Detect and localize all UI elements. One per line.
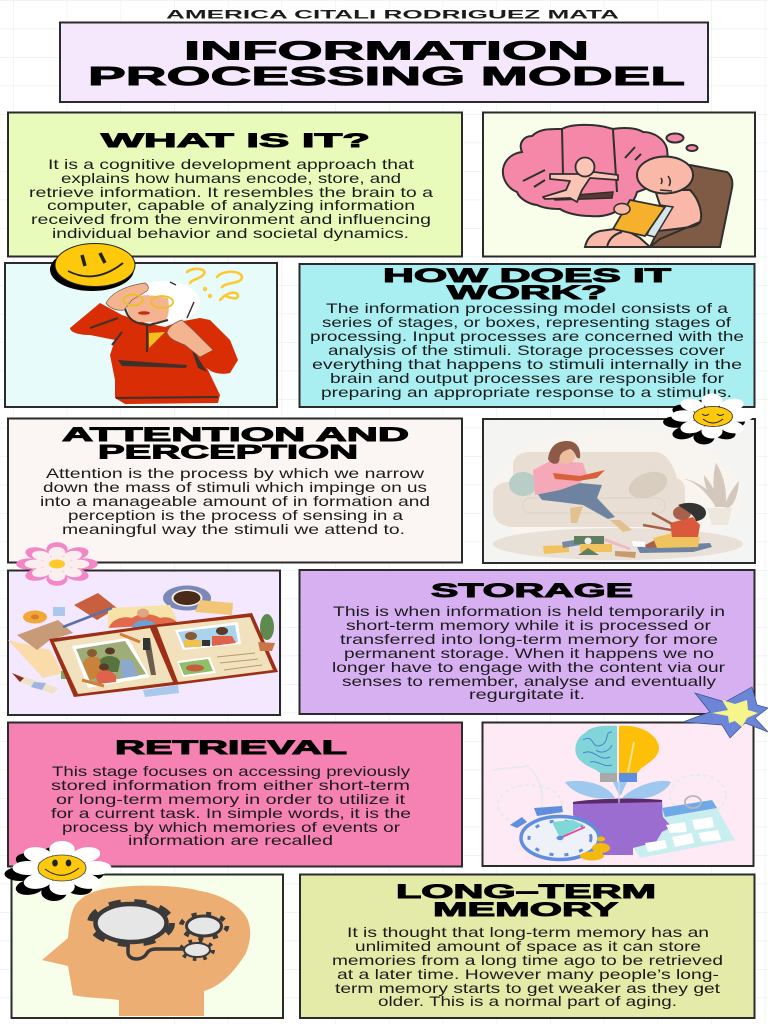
text: long-term memory — [332, 924, 723, 1009]
text: storage: senses to remember, analyse and eventually — [342, 673, 716, 689]
text: how does it work: processing. Input processes are concerned with the — [310, 328, 744, 344]
panel: brain lightbulb illustration — [482, 722, 754, 866]
text: what is it: retrieve information. It resembles the brain to a — [29, 184, 433, 200]
text: attention and perception: meaningful way the stimuli we attend to. — [62, 521, 405, 537]
heading: how does it work: HOW DOES IT — [383, 266, 672, 287]
heading: storage: STORAGE — [431, 581, 633, 602]
text: how does it work — [310, 300, 744, 400]
text: what is it: individual behavior and societal dynamics. — [52, 225, 409, 241]
heading: attention and perception: ATTENTION AND — [62, 425, 409, 446]
icon: small gear — [181, 941, 213, 959]
text: long-term memory: older. This is a normal part of aging. — [378, 993, 677, 1009]
icon: sofa — [493, 452, 685, 527]
icon: large gear — [90, 902, 172, 944]
text: storage: longer have to engage with the content via our — [332, 659, 725, 675]
icon: soft background oval — [492, 428, 742, 560]
heading: long-term memory: LONG–TERM — [396, 882, 656, 903]
icon: open album — [49, 613, 278, 697]
text: what is it: computer, capable of analyzing information — [47, 197, 415, 213]
panel: thought bubble illustration — [483, 112, 755, 256]
icon: small thought bubbles — [666, 134, 698, 151]
heading: long-term memory: MEMORY — [433, 900, 619, 921]
heading: how does it work: WORK? — [447, 283, 607, 304]
text: attention and perception: perception is the process of sensing in a — [68, 507, 403, 523]
icon: stopwatch — [510, 806, 599, 860]
text: what is it: received from the environment and influencing — [31, 211, 431, 227]
icon: chair — [650, 165, 732, 247]
icon: woman in red hoodie — [70, 281, 238, 404]
icon: connector pipe — [128, 941, 185, 959]
text: how does it work: preparing an appropriate response to a stimulus. — [321, 384, 732, 400]
text: storage — [332, 603, 725, 702]
icon: leaves — [565, 781, 671, 800]
icon: pink flower sticker — [16, 542, 98, 586]
text: how does it work: The information processing model consists of a — [326, 300, 728, 316]
icon: plant — [684, 463, 739, 525]
icon: question marks — [187, 269, 242, 300]
text: retrieval: for a current task. In simple words, it is the — [51, 805, 411, 821]
panel: attention and perception — [8, 418, 462, 562]
icon: coins — [580, 836, 610, 860]
icon: calendar — [634, 796, 735, 858]
text: what is it — [29, 156, 433, 241]
icon: star sticker — [683, 687, 768, 738]
heading: long-term memory — [396, 882, 656, 921]
icon: sleepy daisy sticker — [663, 394, 753, 444]
icon: baby — [632, 503, 712, 553]
icon: reading mother — [533, 441, 632, 532]
text: storage: regurgitate it. — [469, 686, 585, 702]
text: long-term memory: term memory starts to get weaker as they get — [335, 980, 720, 996]
panel: mother and baby illustration — [483, 419, 755, 563]
text: retrieval: information are recalled — [128, 832, 333, 848]
heading: attention and perception — [62, 425, 409, 464]
heading: retrieval: RETRIEVAL — [115, 738, 348, 759]
icon: head silhouette — [42, 886, 250, 1016]
text: long-term memory: unlimited amount of space as it can store — [355, 938, 701, 954]
text: storage: short-term memory while it is processed or — [346, 617, 711, 633]
text: storage: This is when information is held temporarily in — [333, 603, 725, 619]
panel: how does it work — [300, 264, 754, 407]
heading: how does it work — [383, 266, 672, 304]
heading: attention and perception: PERCEPTION — [98, 442, 358, 464]
title banner: INFORMATION — [184, 36, 589, 66]
title banner — [60, 22, 708, 102]
icon: smiling daisy sticker — [4, 841, 112, 901]
icon: faint background gears and leaves — [492, 766, 726, 825]
text: retrieval: process by which memories of events or — [62, 819, 400, 835]
text: what is it: explains how humans encode, store, and — [61, 170, 401, 186]
text: storage: transferred into long-term memory for more — [340, 631, 718, 647]
icon: reading person — [585, 156, 701, 247]
text: attention and perception: Attention is the process by which we narrow — [46, 465, 425, 481]
text: what is it: It is a cognitive development approach that — [48, 156, 414, 172]
text: long-term memory: at a later time. However many people’s long- — [337, 966, 719, 982]
text: how does it work: series of stages, or boxes, representing stages of — [322, 314, 731, 330]
panel: storage — [300, 570, 754, 714]
icon: purple head — [573, 780, 672, 855]
text: storage: permanent storage. When it happens we no — [344, 645, 714, 661]
text: retrieval — [51, 763, 411, 848]
icon: medium gear — [181, 914, 227, 938]
icon: toy blocks — [543, 536, 636, 558]
panel: head with gears illustration — [12, 874, 283, 1018]
icon: coffee cup — [163, 586, 211, 610]
text: retrieval: This stage focuses on accessing previously — [52, 763, 410, 779]
panel: photo album illustration — [8, 570, 280, 715]
title banner: PROCESSING MODEL — [88, 61, 685, 91]
text: attention and perception: into a manageable amount of in formation and — [40, 493, 430, 509]
icon: smiley sticker — [50, 244, 135, 291]
icon: rug — [493, 528, 743, 560]
icon: swing with baby — [523, 129, 641, 202]
text: attention and perception: down the mass of stimuli which impinge on us — [43, 479, 427, 495]
author name: AMERICA CITALI RODRIGUEZ MATA — [166, 8, 620, 22]
text: retrieval: stored information from either short-term — [51, 777, 410, 793]
text: long-term memory: It is thought that long-term memory has an — [347, 924, 709, 940]
panel: confused woman illustration — [5, 263, 277, 407]
icon: brain lightbulb — [575, 726, 659, 782]
panel: long-term memory — [300, 874, 754, 1018]
text: how does it work: analysis of the stimuli. Storage processes cover — [328, 342, 725, 358]
text: how does it work: brain and output processes are responsible for — [330, 370, 724, 386]
panel: what is it — [8, 112, 462, 256]
icon: thought cloud — [503, 125, 670, 216]
heading: what is it: WHAT IS IT? — [101, 131, 370, 152]
text: attention and perception — [40, 465, 430, 537]
panel: retrieval — [8, 722, 462, 866]
text: how does it work: everything that happens to stimuli internally in the — [312, 356, 742, 372]
text: retrieval: or long-term memory in order to utilize it — [56, 791, 405, 807]
text: long-term memory: memories from a long time ago to be retrieved — [332, 952, 723, 968]
icon: scattered papers and photos — [8, 593, 274, 697]
